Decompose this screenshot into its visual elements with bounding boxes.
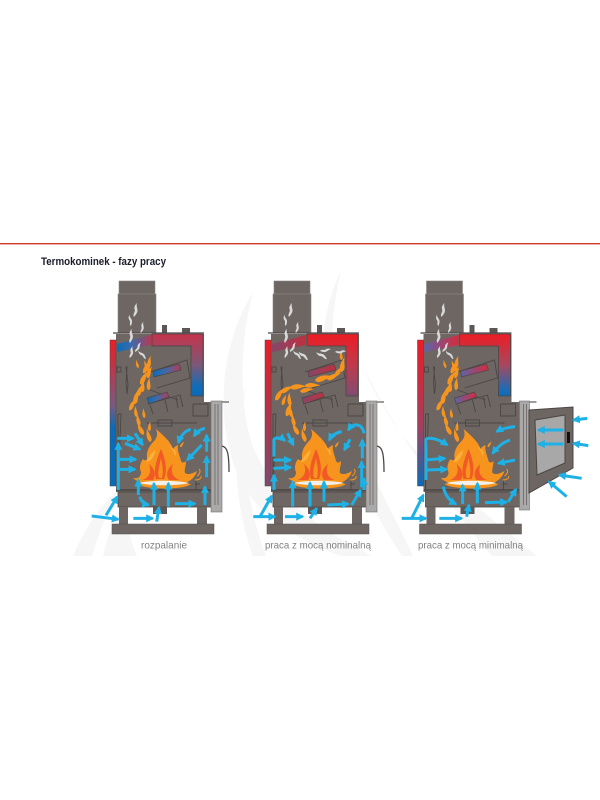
stove: praca z moca minimalna — [402, 281, 588, 534]
flame licks — [435, 355, 460, 418]
air flow arrows — [92, 428, 207, 522]
fire — [133, 406, 201, 488]
stove: praca z moca nominalna — [253, 281, 384, 534]
smoke — [127, 303, 148, 359]
flame licks — [128, 355, 153, 418]
water jacket — [418, 334, 510, 486]
door frame — [211, 401, 229, 512]
background watermark swooshes — [73, 270, 537, 556]
smoke — [282, 303, 303, 359]
caption: rozpalanie: rozpalanie — [141, 540, 187, 552]
air flow arrows — [253, 425, 364, 518]
top rule — [0, 243, 600, 244]
caption: praca z moca minimalna: praca z mocą minimalną — [418, 540, 523, 552]
water jacket — [265, 334, 358, 486]
water jacket — [110, 334, 203, 486]
fire — [440, 406, 509, 488]
door frame — [520, 401, 536, 510]
smoke — [434, 303, 455, 359]
stove: rozpalanie — [92, 281, 229, 534]
open door — [529, 407, 573, 493]
air flow arrows — [402, 418, 588, 518]
title: Termokominek - fazy pracy — [41, 256, 167, 268]
flame licks — [274, 350, 346, 417]
fire — [288, 406, 356, 488]
door frame — [366, 401, 384, 512]
caption: praca z moca nominalna: praca z mocą nominalną — [265, 540, 371, 552]
